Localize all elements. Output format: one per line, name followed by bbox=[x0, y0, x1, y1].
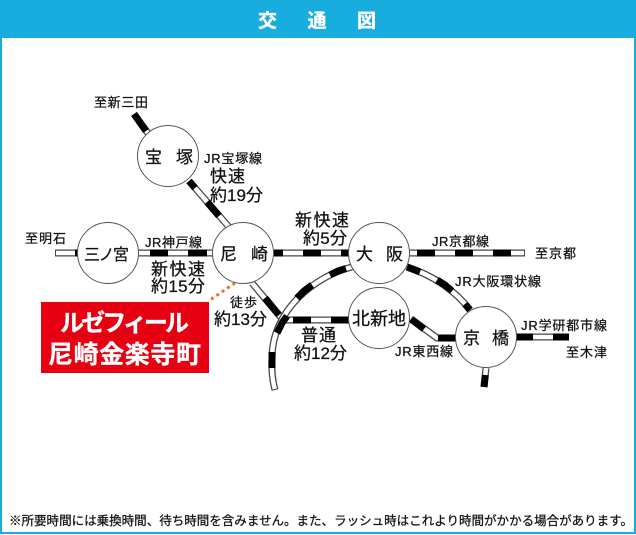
station: Kyobashi bbox=[456, 306, 516, 368]
rail: local line to Kitashinchi bbox=[284, 316, 349, 324]
label: JR Osaka loop line: JR大阪環状線 bbox=[455, 274, 541, 289]
label: to Kizu: 至木津 bbox=[566, 345, 607, 360]
label: JR Takarazuka line: JR宝塚線 bbox=[204, 151, 262, 166]
time: special rapid 5 min: 約5分 bbox=[303, 229, 347, 248]
rail: curved line to Osaka bbox=[272, 267, 352, 390]
label: JR Tozai line: JR東西線 bbox=[395, 344, 453, 359]
time: local 12 min: 約12分 bbox=[294, 344, 347, 363]
time: walk 13 min bbox=[214, 295, 267, 329]
rail: JR Tozai line bbox=[411, 319, 456, 338]
station: Kyobashi: 京 橋 bbox=[463, 329, 509, 348]
label: to Akashi: 至明石 bbox=[25, 231, 66, 246]
time: walk 13 min: 約13分 bbox=[214, 310, 267, 329]
rail: to Shin-Sanda bbox=[134, 114, 150, 136]
station: Osaka: 大 阪 bbox=[356, 245, 403, 264]
label: JR Gakkentoshi line: JR学研都市線 bbox=[521, 318, 607, 333]
time: special rapid 5 min: 新快速 bbox=[295, 211, 349, 230]
time: local 12 min bbox=[294, 326, 347, 363]
time: special rapid 15 min: 約15分 bbox=[151, 277, 205, 296]
station: Takarazuka bbox=[138, 126, 198, 186]
time: walk 13 min: 徒歩 bbox=[230, 295, 257, 310]
rail: walking link from Amagasaki bbox=[252, 283, 283, 320]
time: special rapid 15 min bbox=[151, 260, 205, 296]
title banner bbox=[0, 0, 636, 38]
property name callout: ルゼフィール bbox=[60, 309, 189, 337]
footnote: ※所要時間には乗換時間、待ち時間を含みません。また、ラッシュ時はこれより時間がかかる場合があります。 bbox=[9, 513, 633, 528]
station: Amagasaki: 尼 崎 bbox=[220, 245, 268, 264]
station: Osaka bbox=[348, 222, 410, 284]
rail: JR Gakkentoshi line bbox=[516, 334, 569, 340]
rail: Amagasaki to Osaka bbox=[274, 250, 349, 256]
label: to Kyoto: 至京都 bbox=[535, 246, 576, 261]
rail: JR Osaka loop line bbox=[407, 267, 470, 310]
station: Kitashinchi bbox=[348, 288, 410, 348]
label: JR Kyoto line: JR京都線 bbox=[432, 234, 489, 249]
station: Takarazuka: 宝 塚 bbox=[145, 148, 193, 167]
time: special rapid 15 min: 新快速 bbox=[151, 260, 205, 279]
label: JR Kobe line: JR神戸線 bbox=[145, 235, 202, 250]
time: special rapid 5 min bbox=[295, 211, 349, 248]
time: rapid 19 min: 約19分 bbox=[210, 186, 263, 205]
station: Sannomiya bbox=[78, 222, 138, 284]
rail: to Akashi bbox=[55, 250, 78, 256]
station: Sannomiya: 三ノ宮 bbox=[84, 246, 129, 264]
rail: JR Kyoto line bbox=[409, 250, 525, 256]
title banner: 交 通 図 bbox=[258, 10, 376, 32]
walking route dotted line bbox=[210, 283, 235, 300]
property name callout bbox=[41, 302, 209, 373]
station: Amagasaki bbox=[212, 222, 274, 284]
rail: JR Kobe line bbox=[138, 250, 214, 256]
time: rapid 19 min bbox=[210, 167, 263, 205]
label: to Shin-Sanda: 至新三田 bbox=[94, 95, 148, 110]
rail: JR Takarazuka line bbox=[189, 181, 229, 227]
time: local 12 min: 普通 bbox=[301, 326, 336, 345]
rail: south of Kyobashi bbox=[484, 368, 486, 387]
time: rapid 19 min: 快速 bbox=[210, 167, 245, 186]
property name callout: 尼崎金楽寺町 bbox=[48, 341, 201, 369]
station: Kitashinchi: 北新地 bbox=[352, 309, 406, 329]
